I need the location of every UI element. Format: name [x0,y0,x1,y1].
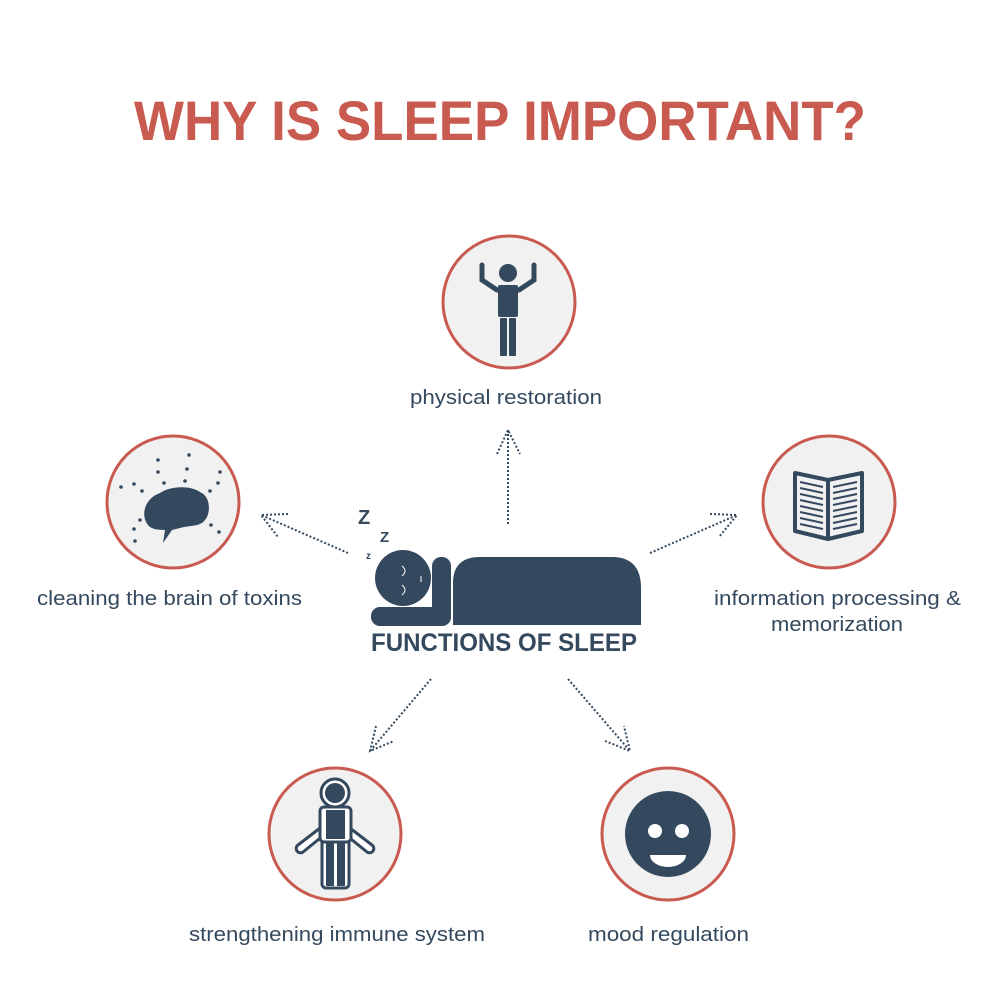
title: WHY IS SLEEP IMPORTANT? [134,89,866,152]
zzz [358,507,389,562]
arrow: right [650,514,737,553]
zzz: Z [358,507,370,529]
panel: physical restoration [443,236,575,368]
icon: person arms up [482,264,534,356]
central figure: sleeping person [358,507,641,626]
panel: immune system [269,768,401,900]
label: immune system: strengthening immune system [189,924,485,946]
arrow: up [497,430,520,524]
icon: smiley [625,791,711,877]
panel: cleaning brain [107,436,239,568]
icon: outlined person [296,779,374,888]
arrow: bottom-left [370,679,431,751]
icon: brain [144,487,209,543]
zzz: Z [380,529,389,546]
arrow: left [261,514,348,553]
label: cleaning brain: cleaning the brain of toxins [37,588,302,610]
arrow: bottom-right [568,679,630,751]
panel: information processing [763,436,895,568]
label: information processing: memorization [771,614,903,636]
panel: mood regulation [602,768,734,900]
zzz: z [366,551,371,562]
label: information processing: information processing & [714,588,962,610]
label: physical restoration: physical restoration [410,387,602,409]
icon: book [795,473,862,539]
arrows [261,430,737,751]
central label: FUNCTIONS OF SLEEP [371,629,637,657]
label: mood regulation: mood regulation [588,924,749,946]
